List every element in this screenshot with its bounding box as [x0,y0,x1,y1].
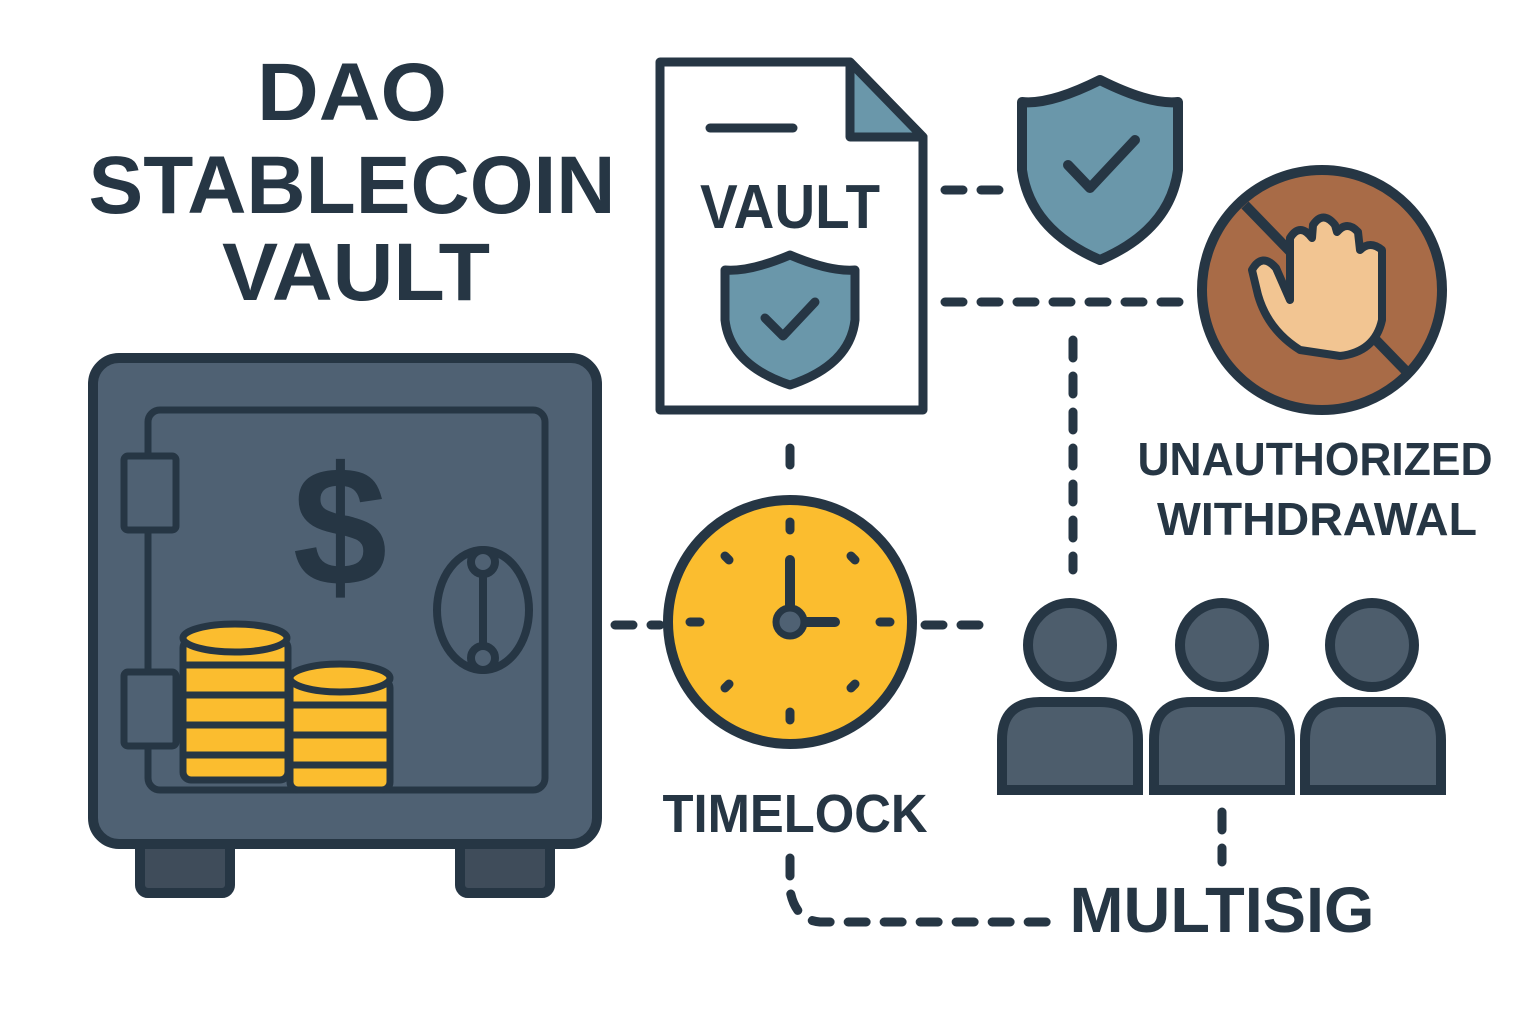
label: unauthorized withdrawal [1138,433,1492,545]
title [88,47,616,318]
icon: coins [183,624,390,790]
icon: handle [437,550,529,670]
icon: shield [1022,80,1178,260]
title: STABLECOIN [88,140,616,231]
label: unauthorized withdrawal: UNAUTHORIZED [1138,433,1492,485]
icon: clock [668,500,912,744]
label: timelock: TIMELOCK [662,784,928,844]
title: VAULT [222,227,490,318]
connector lines [615,190,1222,922]
label: unauthorized withdrawal: WITHDRAWAL [1157,493,1477,545]
title: DAO [257,47,447,138]
icon: dollar sign: $ [293,432,387,622]
icon: prohibited hand [1202,170,1442,410]
icon: multisig people [1002,603,1441,790]
label: multisig: MULTISIG [1070,874,1374,946]
icon: safe [93,358,597,893]
icon: vault document: VAULT [700,173,880,242]
icon: vault document [660,62,923,410]
